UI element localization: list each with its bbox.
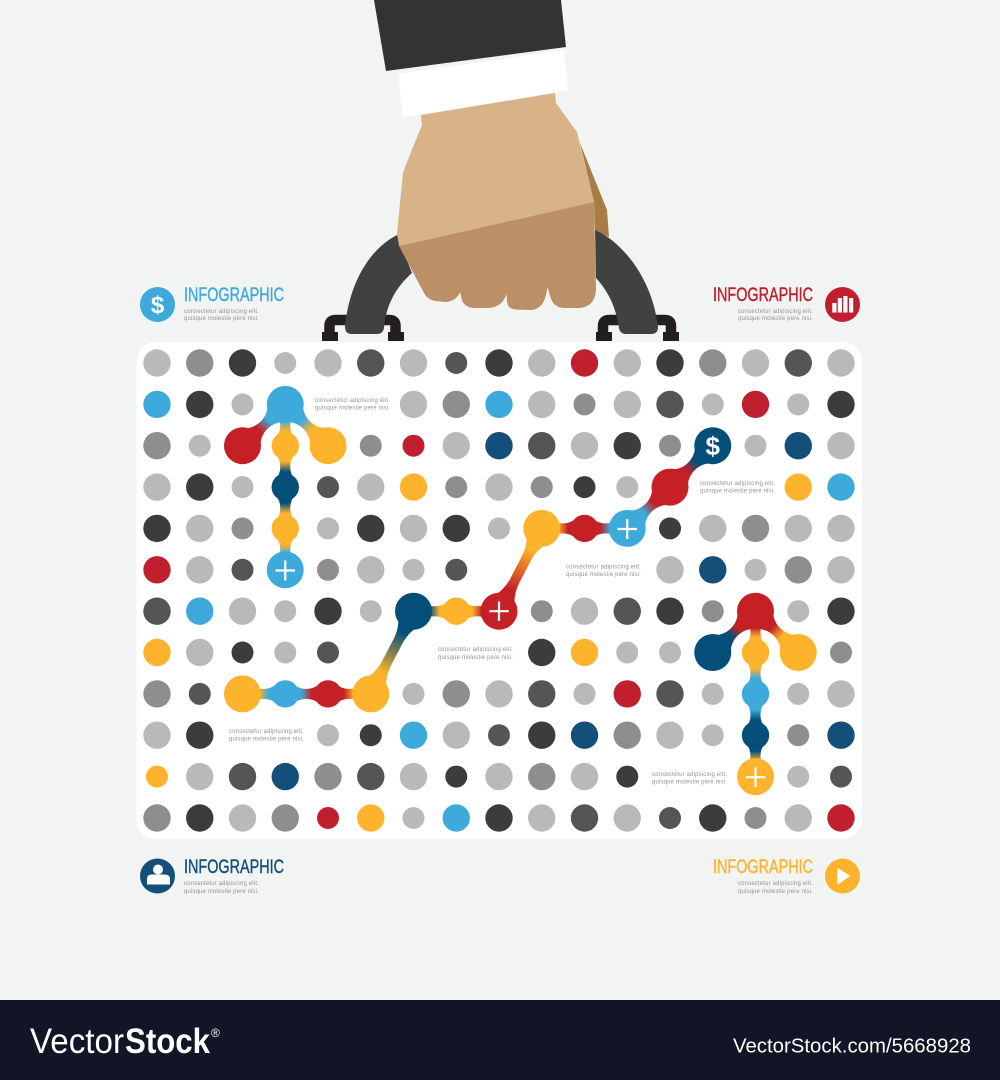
text block: consectetur adipiscing elit. — [184, 880, 259, 887]
logo: VectorStock — [30, 1022, 220, 1061]
icon: plus — [746, 767, 765, 787]
text block: consectetur adipiscing elit. — [184, 308, 259, 315]
text block: quisque molestie pere nisi. — [738, 315, 813, 322]
dot grid — [143, 349, 855, 832]
text block — [184, 880, 259, 895]
text block — [738, 308, 813, 322]
caption: lower left: consectetur adipiscing elit. — [229, 728, 304, 735]
text block: consectetur adipiscing elit. — [738, 880, 813, 887]
icon: dollar — [140, 287, 175, 322]
icon: plus — [618, 519, 637, 539]
briefcase handle brackets — [322, 320, 679, 341]
caption: top-left arrow: quisque molestie pere nisi. — [315, 404, 390, 412]
text block: quisque molestie pere nisi. — [184, 315, 259, 322]
icon: hand holding briefcase handle — [322, 0, 679, 341]
legend: bottom right — [713, 857, 860, 895]
caption: top-left arrow — [315, 397, 390, 412]
caption: dollar node: consectetur adipiscing elit. — [700, 480, 775, 487]
fist fingers — [399, 202, 596, 310]
shirt cuff — [398, 50, 568, 117]
heading: INFOGRAPHIC — [184, 285, 284, 306]
text block: quisque molestie pere nisi. — [184, 888, 259, 895]
logo: VectorStock: Vector — [30, 1022, 124, 1061]
caption: dollar node — [700, 480, 775, 494]
caption: centre right: quisque molestie pere nisi. — [566, 571, 641, 578]
icon: dollar: $ — [706, 431, 721, 461]
caption: lower left — [229, 728, 304, 742]
hand upper — [397, 93, 594, 246]
icon: play — [825, 858, 860, 894]
caption: centre — [438, 646, 513, 661]
heading: INFOGRAPHIC — [713, 285, 813, 306]
connected path: rising line — [224, 427, 731, 712]
panel: briefcase body — [136, 342, 862, 839]
legend: top right — [713, 285, 860, 322]
image reference: VectorStock.com/5668928 — [733, 1036, 971, 1058]
icon: dollar: $ — [151, 292, 165, 319]
briefcase handle arcs — [345, 229, 658, 334]
caption: lower right: quisque molestie pere nisi. — [652, 778, 727, 786]
connected path: top-left arrow — [224, 386, 346, 588]
caption: dollar node: quisque molestie pere nisi. — [700, 488, 775, 494]
caption: lower right — [652, 771, 727, 786]
icon: bar chart — [825, 287, 860, 322]
text block: consectetur adipiscing elit. — [738, 308, 813, 315]
caption: centre: consectetur adipiscing elit. — [438, 646, 513, 653]
text block — [184, 308, 259, 322]
caption: lower left: quisque molestie pere nisi. — [229, 736, 304, 742]
icon: person — [140, 858, 175, 894]
icon: plus — [276, 560, 295, 580]
logo: VectorStock: Stock — [125, 1022, 210, 1061]
caption: lower right: consectetur adipiscing elit. — [652, 771, 727, 778]
legend: bottom left — [140, 857, 284, 895]
suit sleeve — [374, 0, 566, 71]
heading: INFOGRAPHIC — [184, 857, 284, 878]
legend: top left — [140, 285, 284, 322]
text block: quisque molestie pere nisi. — [738, 888, 813, 895]
heading: INFOGRAPHIC — [713, 857, 813, 878]
text block — [738, 880, 813, 895]
caption: top-left arrow: consectetur adipiscing elit. — [315, 397, 390, 404]
logo: VectorStock: ® — [211, 1026, 220, 1040]
caption: centre right: consectetur adipiscing elit. — [566, 564, 641, 570]
icon: plus — [489, 602, 509, 621]
caption: centre right — [566, 564, 641, 578]
footer bar — [0, 1000, 1000, 1080]
caption: centre: quisque molestie pere nisi. — [438, 654, 513, 661]
connected path: lower-right arrow — [694, 593, 817, 795]
hand back shade — [580, 143, 609, 237]
